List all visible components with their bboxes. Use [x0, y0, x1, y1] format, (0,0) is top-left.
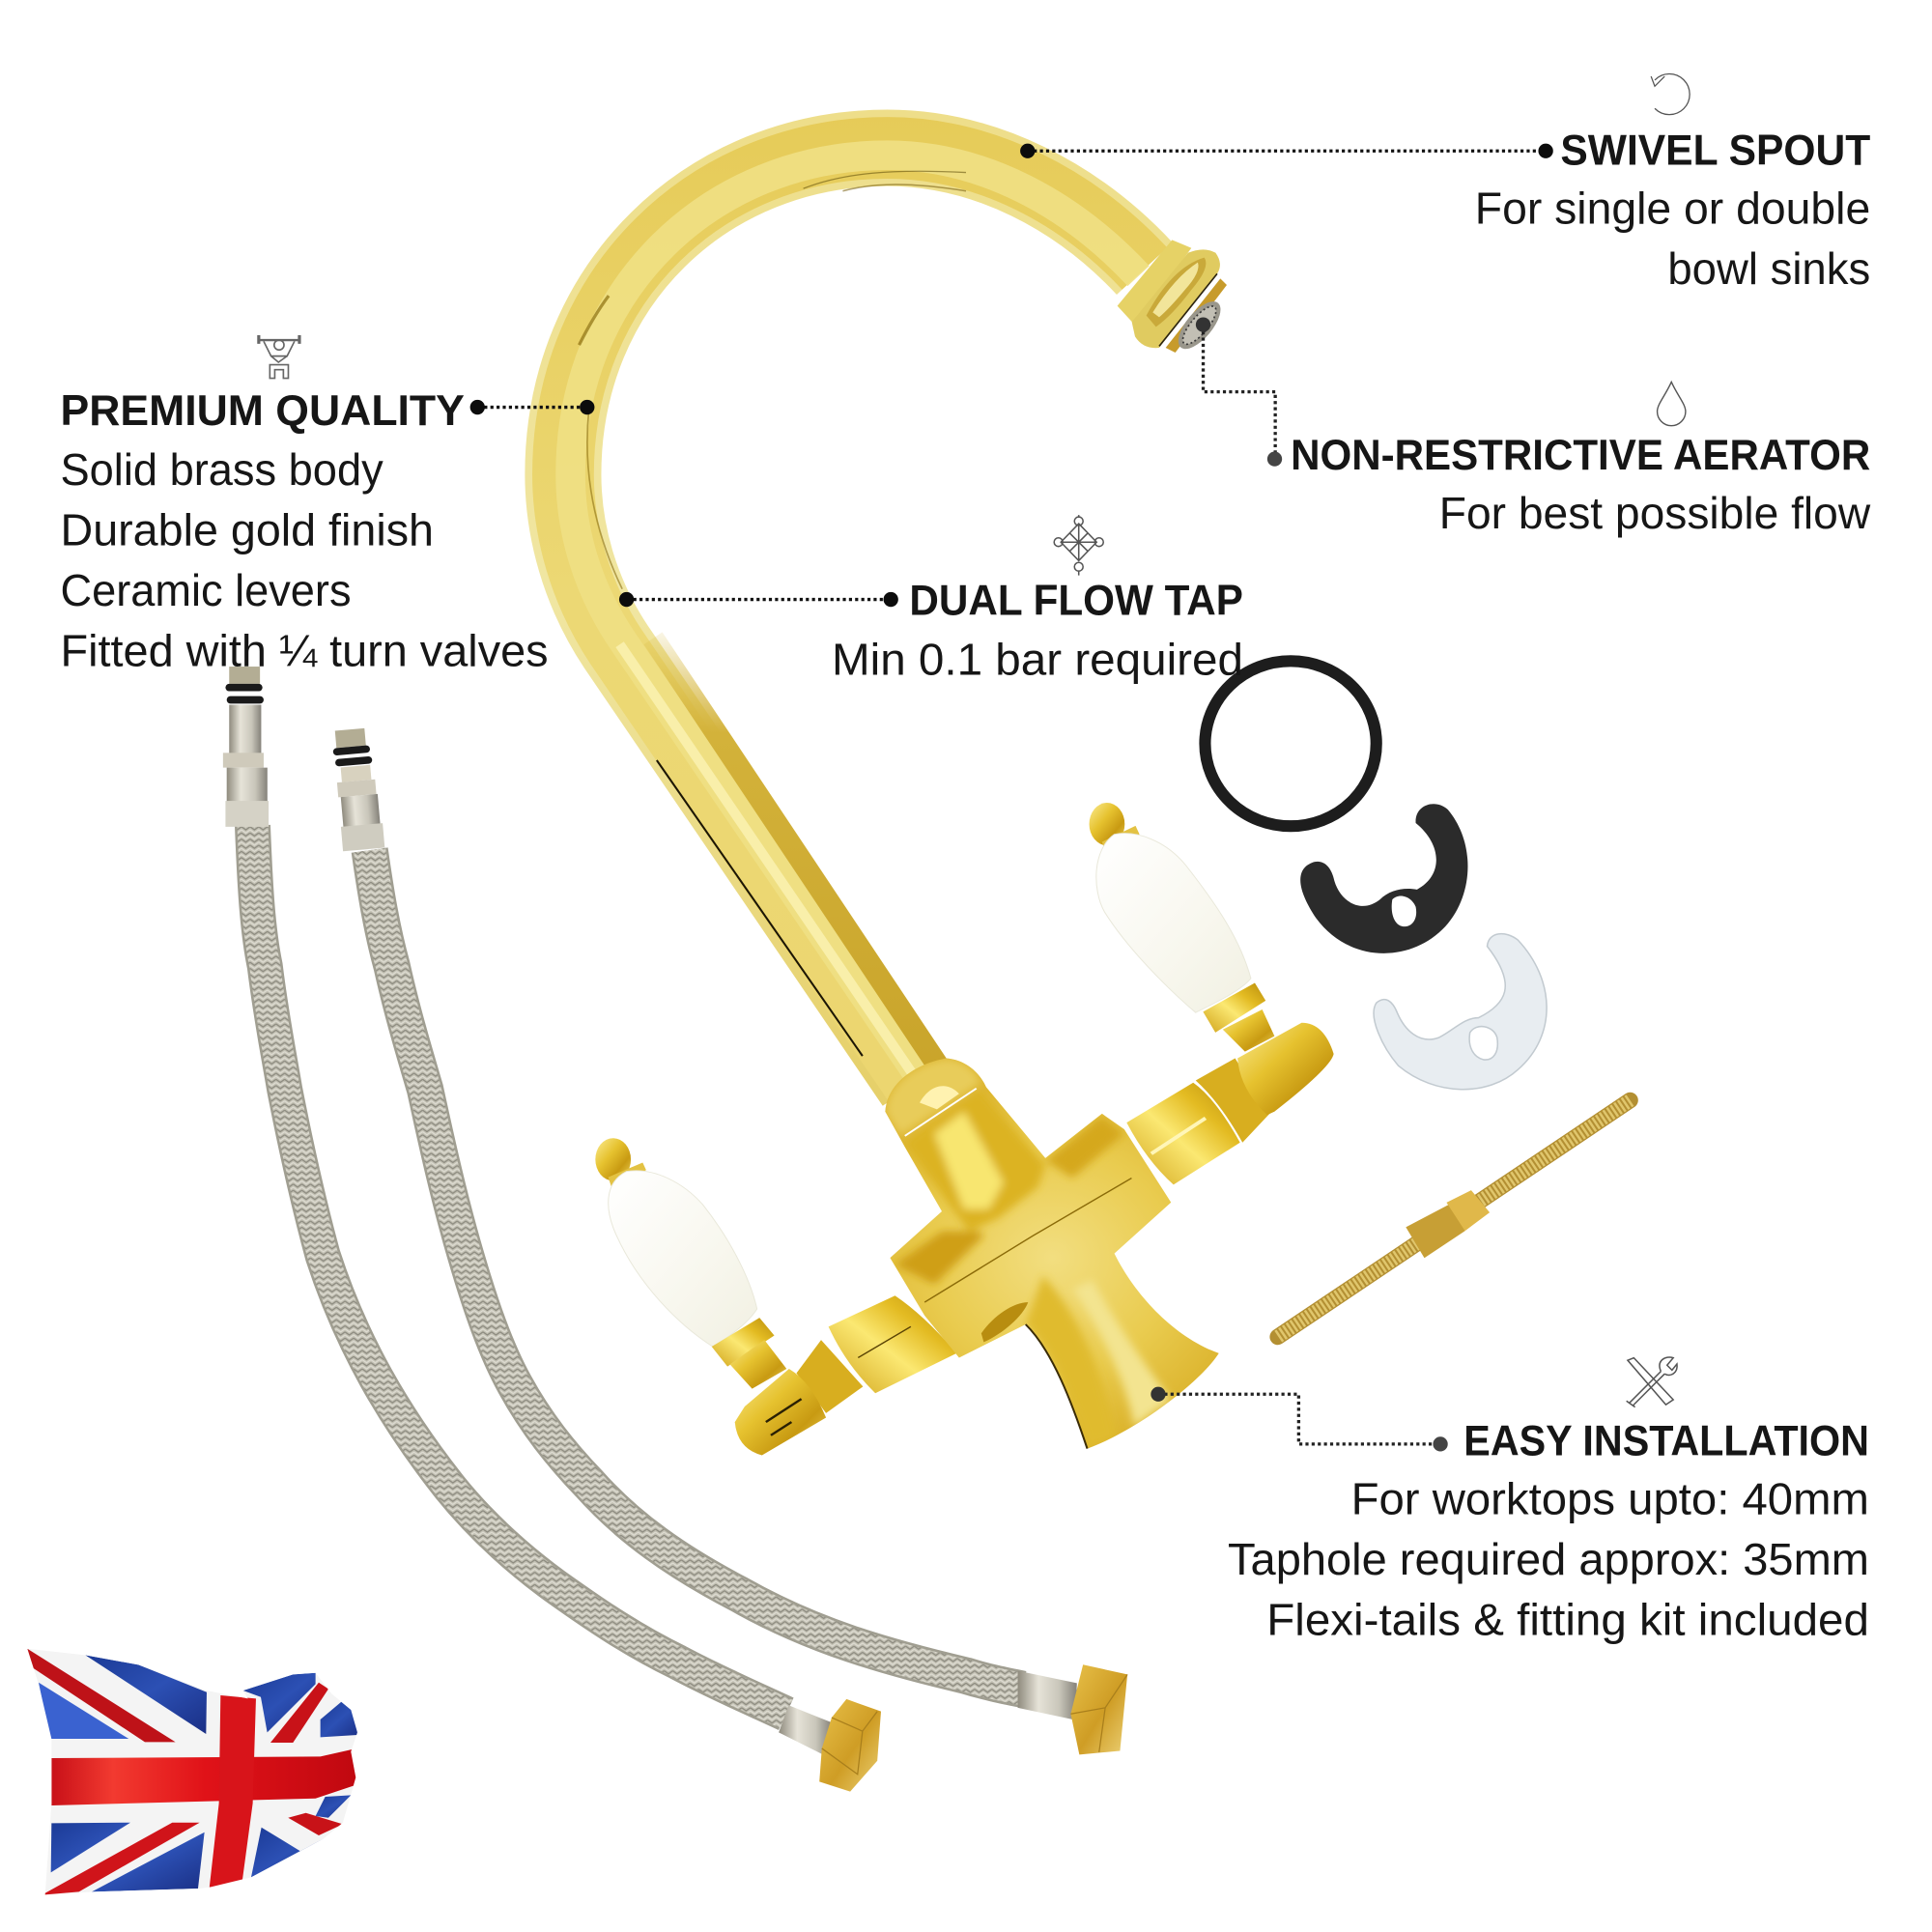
icon: endless knot	[1054, 515, 1103, 576]
silver mounting plate	[1374, 934, 1547, 1090]
icon: weightlifter	[259, 335, 299, 379]
hose top fitting	[331, 727, 384, 851]
hose bottom brass nut	[779, 1699, 881, 1792]
tap spout	[563, 148, 1145, 1084]
right lever	[1090, 803, 1274, 1052]
central body	[885, 1059, 1219, 1449]
callout leader: easy installation	[1151, 1387, 1448, 1452]
text: premium quality: PREMIUM QUALITY	[60, 387, 465, 435]
icon: swivel arrow	[1651, 74, 1690, 115]
text: swivel spout: bowl sinks	[1667, 243, 1870, 294]
text: dual flow tap	[832, 577, 1243, 684]
callout leader: premium quality	[470, 400, 594, 414]
black mounting plate	[1300, 804, 1467, 953]
hose bottom brass nut	[1018, 1664, 1127, 1754]
left lever	[595, 1138, 786, 1389]
callout leader: dual flow tap	[619, 592, 898, 607]
text: non-restrictive aerator: For best possible flow	[1439, 488, 1871, 538]
flexi hose: left	[223, 667, 881, 1792]
threaded mounting rod	[1278, 1100, 1631, 1337]
text: premium quality: Ceramic levers	[60, 565, 352, 615]
callout leader: swivel spout	[1020, 144, 1553, 158]
flag blue panels	[39, 1655, 359, 1891]
text: dual flow tap: DUAL FLOW TAP	[909, 577, 1243, 624]
hose braid	[370, 850, 1023, 1690]
body highlights and seams	[905, 1086, 1131, 1449]
text: easy installation: Taphole required approx: 35mm	[1228, 1534, 1869, 1584]
text: easy installation: EASY INSTALLATION	[1463, 1417, 1869, 1464]
icon: crossed tools	[1627, 1357, 1677, 1407]
tap nozzle and aerator	[1118, 240, 1228, 355]
callout leader: aerator	[1196, 317, 1282, 467]
text: swivel spout: SWIVEL SPOUT	[1560, 127, 1870, 174]
text: premium quality: Durable gold finish	[60, 504, 434, 554]
icon: water drop	[1658, 382, 1686, 426]
text: premium quality: Solid brass body	[60, 444, 384, 495]
text: easy installation	[1228, 1417, 1869, 1645]
left valve arm	[735, 1295, 956, 1456]
text: non-restrictive aerator	[1291, 432, 1871, 538]
body soft shading	[885, 1059, 1171, 1449]
text: dual flow tap: Min 0.1 bar required	[832, 634, 1243, 684]
flexi hose: right	[331, 727, 1127, 1754]
text: premium quality: Fitted with ¼ turn valves	[60, 625, 549, 675]
hose braid	[252, 826, 786, 1714]
text: non-restrictive aerator: NON-RESTRICTIVE AERATOR	[1291, 432, 1870, 479]
flag red cross	[26, 1649, 359, 1895]
text: easy installation: Flexi-tails & fitting kit included	[1266, 1595, 1869, 1645]
right valve arm	[1126, 1023, 1334, 1184]
hose top fitting	[223, 667, 269, 827]
tap body with levers	[595, 803, 1334, 1456]
rubber O-ring	[1205, 661, 1377, 826]
union flag	[22, 1645, 364, 1900]
text: swivel spout: For single or double	[1475, 184, 1870, 234]
text: easy installation: For worktops upto: 40mm	[1351, 1474, 1869, 1524]
text: swivel spout	[1475, 127, 1870, 294]
text: premium quality	[60, 387, 549, 675]
